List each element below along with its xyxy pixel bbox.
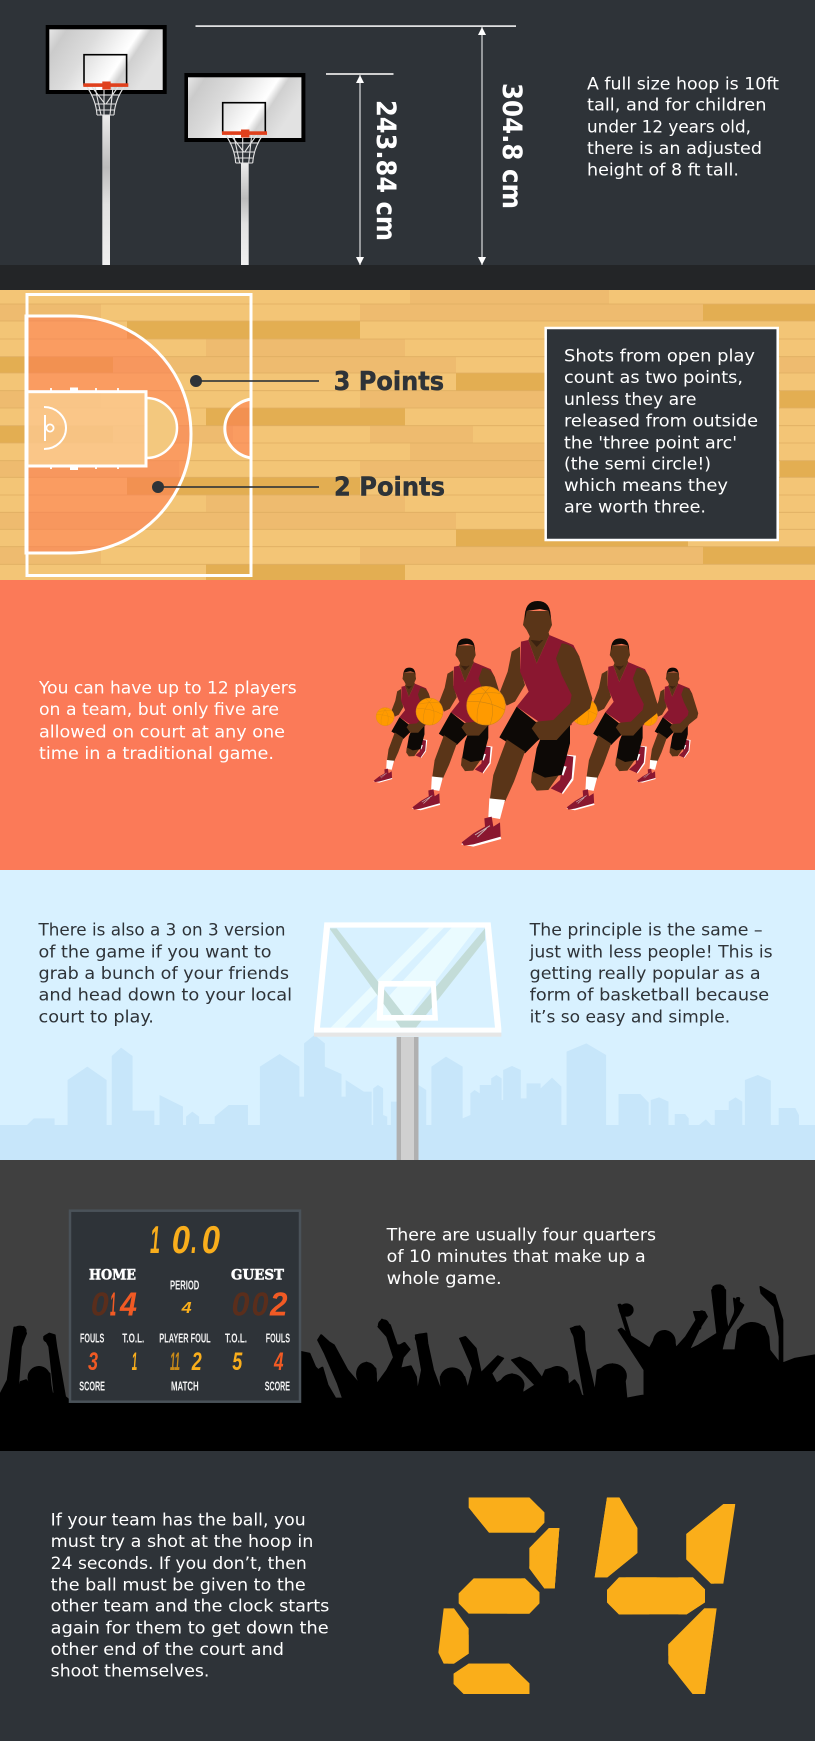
text: team size: allowed on court at any one <box>39 722 285 741</box>
digits: scores and period: 1 <box>110 1286 116 1323</box>
text: hoop height: A full size hoop is 10ft <box>587 74 780 93</box>
icon: full size hoop <box>46 25 167 265</box>
text: shot clock <box>51 1511 329 1681</box>
labels: scoreboard captions: MATCH <box>171 1379 199 1393</box>
text: shot clock: other team and the clock starts <box>51 1597 329 1616</box>
digits: fouls row: 1 <box>132 1348 137 1376</box>
labels: teams <box>89 1267 285 1283</box>
digits: scores and period <box>91 1286 288 1323</box>
callout box: shots text: are worth three. <box>564 498 706 517</box>
callout: 2 points <box>152 473 445 503</box>
label: 304.8 cm: 304.8 cm <box>496 83 527 209</box>
illustration: city skyline <box>0 1035 815 1160</box>
illustration: five players dribbling <box>374 601 698 847</box>
panel: 3 on 3 <box>0 870 815 1160</box>
text: quarters: There are usually four quarters <box>386 1226 656 1245</box>
text: shot clock: other end of the court and <box>51 1640 284 1659</box>
text: hoop height: under 12 years old, <box>587 117 751 136</box>
text: shot clock: must try a shot at the hoop in <box>51 1532 313 1551</box>
digits: scores and period: 4 <box>119 1286 137 1323</box>
digits: game clock <box>150 1219 220 1262</box>
text: 3 on 3 version: and head down to your local <box>38 986 292 1005</box>
digits: game clock: 0 <box>172 1219 190 1262</box>
digits: fouls row: 11 <box>170 1348 180 1376</box>
labels: scoreboard captions: SCORE <box>79 1379 105 1393</box>
chart: court boundary <box>27 294 251 576</box>
callout box: shots text: count as two points, <box>564 368 743 387</box>
text: quarters <box>386 1226 656 1288</box>
digits: game clock: . <box>191 1219 197 1262</box>
labels: scoreboard captions: T.O.L. <box>122 1332 144 1346</box>
digits: scores and period: 0 <box>232 1286 250 1323</box>
text: hoop height <box>587 74 780 180</box>
panel: game quarters <box>0 1160 815 1451</box>
text: shot clock: again for them to get down the <box>51 1618 329 1637</box>
panel: team size <box>0 580 815 870</box>
digits: scores and period: 2 <box>269 1286 288 1323</box>
callout box: shots text: the 'three point arc' <box>564 433 737 452</box>
text: 3 on 3 version: grab a bunch of your friends <box>38 964 289 983</box>
labels: teams: HOME <box>89 1267 136 1283</box>
illustration: crowd silhouette <box>0 1284 815 1451</box>
text: 3 on 3 version: There is also a 3 on 3 version <box>37 921 286 940</box>
callout box: shots text: (the semi circle!) <box>564 454 711 473</box>
text: shot clock: 24 seconds. If you don’t, then <box>51 1554 307 1573</box>
digits: fouls row: 5 <box>232 1348 243 1376</box>
text: principle: getting really popular as a <box>530 964 761 983</box>
text: shot clock: the ball must be given to the <box>51 1576 306 1595</box>
digits: game clock: 1 <box>150 1219 160 1262</box>
digits: fouls row <box>88 1348 284 1376</box>
text: hoop height: there is an adjusted <box>587 139 762 158</box>
text: hoop height: tall, and for children <box>587 96 766 115</box>
labels: scoreboard captions: FOULS <box>266 1332 290 1346</box>
callout: 3 points <box>190 367 444 397</box>
arrow: 243.84 cm height <box>326 73 394 265</box>
text: principle: it’s so easy and simple. <box>530 1007 730 1026</box>
digits: scores and period: 0 <box>252 1286 269 1323</box>
labels: scoreboard captions: PLAYER FOUL <box>159 1332 211 1346</box>
callout: 2 points: 2 Points <box>334 473 445 503</box>
panel: hoop heights <box>0 0 815 290</box>
digits: game clock: 0 <box>202 1219 220 1262</box>
chart: key and free throw area <box>27 388 177 470</box>
chart: center circle <box>225 399 251 458</box>
callout: 3 points: 3 Points <box>334 367 444 397</box>
text: team size <box>38 679 297 763</box>
digits: scores and period: 0 <box>91 1286 109 1323</box>
chart: three point arc <box>26 316 191 553</box>
arrow: 304.8 cm height <box>196 25 516 265</box>
text: 3 on 3 version: court to play. <box>38 1007 154 1026</box>
labels: teams: GUEST <box>231 1267 285 1283</box>
text: shot clock: If your team has the ball, you <box>51 1511 306 1530</box>
callout box: shots text: unless they are <box>564 390 696 409</box>
text: 3 on 3 version <box>37 921 292 1026</box>
digits: scores and period: 4 <box>181 1300 192 1317</box>
text: 3 on 3 version: of the game if you want to <box>38 942 272 961</box>
labels: scoreboard captions: PERIOD <box>170 1279 199 1293</box>
labels: scoreboard captions: SCORE <box>265 1379 290 1393</box>
label: 243.84 cm: 243.84 cm <box>370 100 401 241</box>
text: team size: You can have up to 12 players <box>38 679 297 698</box>
panel: shot clock <box>0 1451 815 1694</box>
text: principle: form of basketball because <box>530 986 769 1005</box>
digits: fouls row: 2 <box>191 1348 202 1376</box>
callout box: shots text: Shots from open play <box>564 347 755 366</box>
text: quarters: whole game. <box>387 1269 502 1288</box>
text: principle <box>529 921 773 1026</box>
text: principle: just with less people! This is <box>529 942 773 961</box>
icon: pole <box>397 1037 418 1160</box>
digits: fouls row: 4 <box>273 1348 284 1376</box>
icon: junior hoop <box>184 73 305 265</box>
icon: transparent backboard <box>314 922 501 1037</box>
digits: fouls row: 3 <box>88 1348 98 1376</box>
labels: scoreboard captions: T.O.L. <box>225 1332 247 1346</box>
scoreboard <box>70 1211 300 1402</box>
panel: court and scoring <box>0 290 815 580</box>
text: hoop height: height of 8 ft tall. <box>587 161 739 180</box>
callout box: shots text <box>546 328 778 540</box>
text: shot clock: shoot themselves. <box>51 1662 209 1681</box>
text: principle: The principle is the same – <box>529 921 763 940</box>
callout box: shots text: released from outside <box>564 412 758 431</box>
text: team size: time in a traditional game. <box>39 744 274 763</box>
labels: scoreboard captions <box>79 1279 290 1393</box>
text: quarters: of 10 minutes that make up a <box>387 1247 646 1266</box>
text: team size: on a team, but only five are <box>39 700 279 719</box>
labels: scoreboard captions: FOULS <box>80 1332 104 1346</box>
callout box: shots text: which means they <box>564 476 728 495</box>
